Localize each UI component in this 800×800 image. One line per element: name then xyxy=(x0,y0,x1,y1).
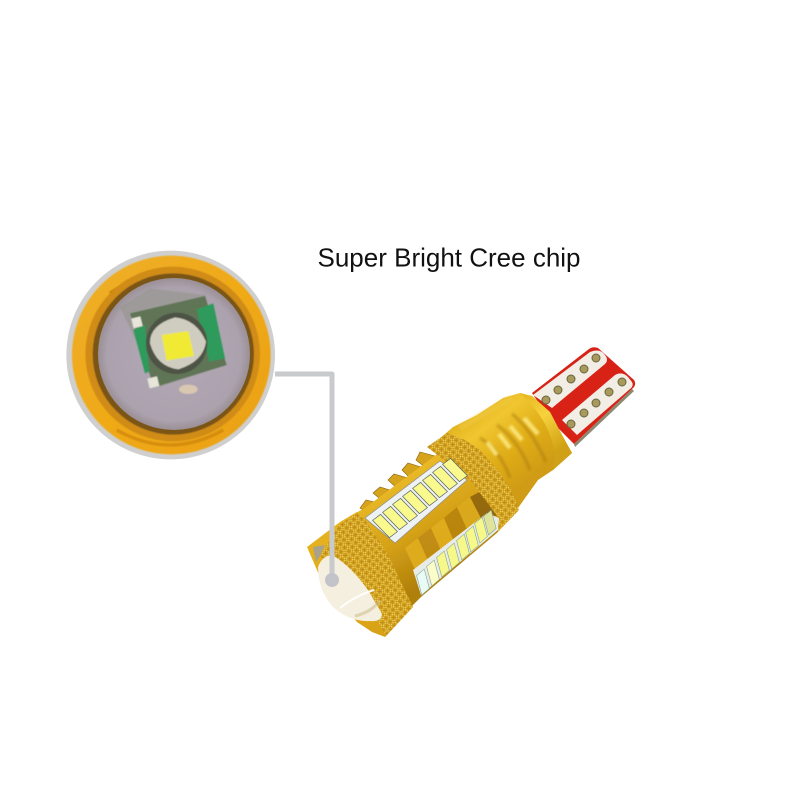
LED board xyxy=(120,288,227,394)
top fins xyxy=(360,452,435,515)
connector line from lens to magnified circle xyxy=(275,374,339,587)
knurled front ring xyxy=(307,512,413,637)
lens interior xyxy=(98,278,250,430)
knurled collar xyxy=(427,433,519,532)
tapered gold body with ridges xyxy=(430,393,572,508)
glass lens xyxy=(318,555,382,621)
upper LED strip xyxy=(365,458,467,543)
title: Super Bright Cree chip: Super Bright Cree chip xyxy=(318,242,581,272)
magnified chip circle xyxy=(66,251,275,459)
LED bulb xyxy=(307,347,635,637)
middle gold core xyxy=(350,452,500,606)
lower fins between LED strips xyxy=(405,490,497,572)
lower LED strip xyxy=(413,510,499,595)
red PCB connector xyxy=(532,347,635,447)
